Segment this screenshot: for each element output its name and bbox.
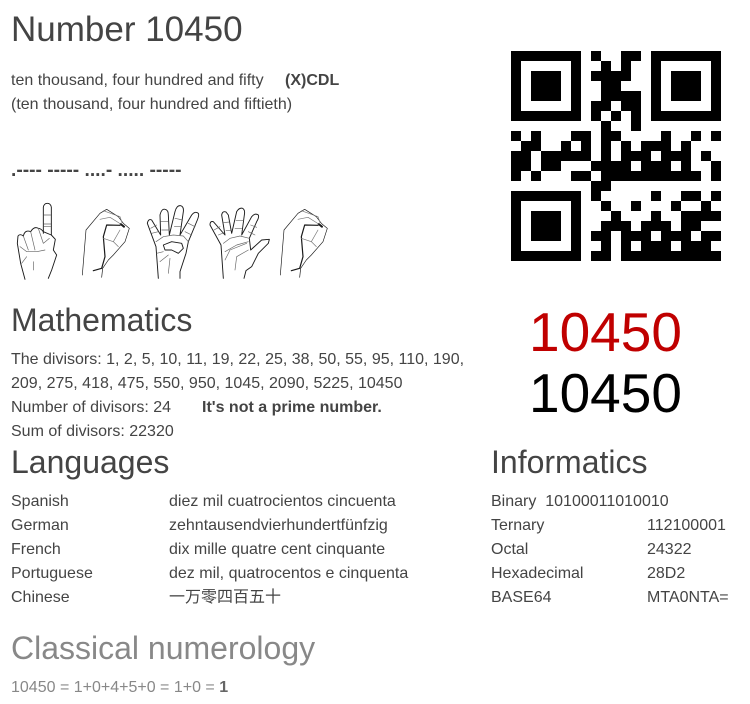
heading: Informatics: Informatics: [491, 444, 647, 480]
mathematics facts: Sum of divisors: 22320: [11, 423, 174, 440]
icon: hand zero: [82, 209, 129, 277]
informatics table: BASE64: [491, 589, 551, 606]
informatics table: 24322: [647, 541, 692, 558]
mathematics facts: It's not a prime number.: [202, 399, 382, 416]
heading: Classical numerology: Classical numerology: [11, 630, 315, 666]
number name and roman numeral: ten thousand, four hundred and fifty: [11, 72, 264, 89]
informatics table: Binary 10100011010010: [491, 493, 669, 510]
informatics table: 28D2: [647, 565, 685, 582]
number name and roman numeral: (X)CDL: [285, 72, 339, 89]
informatics table: Hexadecimal: [491, 565, 583, 582]
languages table: dix mille quatre cent cinquante: [169, 541, 385, 558]
icon: hand four: [147, 206, 199, 278]
icon: hand zero: [280, 209, 327, 277]
informatics table: [491, 493, 729, 606]
languages table: 一万零四百五十: [169, 589, 281, 606]
number name and roman numeral: [11, 72, 339, 113]
informatics table: Octal: [491, 541, 528, 558]
mathematics facts: Number of divisors: 24: [11, 399, 171, 416]
mathematics facts: The divisors: 1, 2, 5, 10, 11, 19, 22, 25, 38, 50, 55, 95, 110, 190,: [11, 351, 464, 368]
informatics table: Ternary: [491, 517, 544, 534]
languages table: [11, 493, 408, 606]
icon: hand five: [210, 208, 269, 278]
languages table: German: [11, 517, 69, 534]
numerology sum: 10450 = 1+0+4+5+0 = 1+0 = 1: [11, 679, 228, 696]
sign language hands: [16, 202, 328, 280]
mathematics facts: 209, 275, 418, 475, 550, 950, 1045, 2090, 5225, 10450: [11, 375, 402, 392]
morse code: .---- ----- ....- ..... -----: [11, 160, 181, 181]
number name and roman numeral: (ten thousand, four hundred and fiftieth): [11, 96, 292, 113]
informatics table: 112100001: [647, 517, 726, 534]
languages table: French: [11, 541, 61, 558]
languages table: Spanish: [11, 493, 69, 510]
title: Number 10450: [11, 10, 243, 49]
QR code: [511, 51, 721, 261]
informatics table: MTA0NTA=: [647, 589, 729, 606]
big black number: 10450: [529, 362, 682, 424]
heading: Languages: Languages: [11, 444, 169, 480]
icon: hand one: [17, 203, 57, 279]
languages table: diez mil cuatrocientos cincuenta: [169, 493, 396, 510]
languages table: Portuguese: [11, 565, 93, 582]
mathematics facts: [11, 351, 464, 440]
languages table: Chinese: [11, 589, 70, 606]
big red number: 10450: [529, 301, 682, 363]
languages table: zehntausendvierhundertfünfzig: [169, 517, 388, 534]
languages table: dez mil, quatrocentos e cinquenta: [169, 565, 408, 582]
heading: Mathematics: Mathematics: [11, 302, 192, 338]
